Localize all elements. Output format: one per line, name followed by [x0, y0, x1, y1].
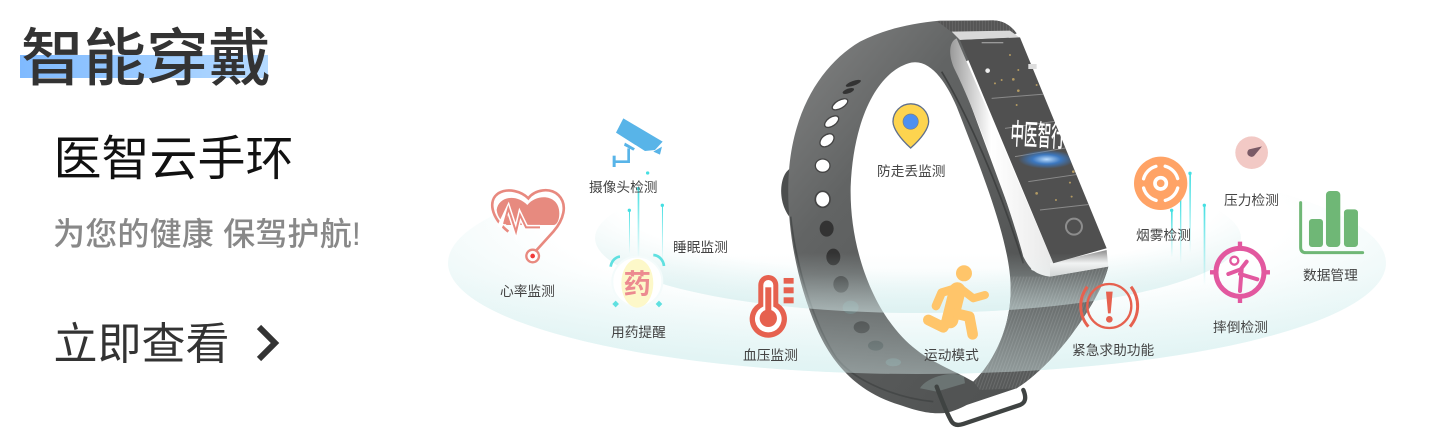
feature: 防走丢监测: 防走丢监测 — [877, 164, 945, 179]
buckle loop — [920, 374, 1025, 425]
feature: 心率监测: 心率监测 — [500, 283, 555, 299]
screen text: 中医智行 — [1010, 118, 1066, 153]
feature: 运动模式 — [924, 265, 985, 363]
icon: runner — [928, 265, 985, 334]
feature: 睡眠监测: 睡眠监测 — [673, 240, 728, 255]
feature: 防走丢监测 — [877, 104, 945, 179]
feature: 摔倒检测 — [1210, 242, 1270, 335]
icon: thermometer — [750, 275, 794, 338]
icon: surveillance camera — [613, 118, 663, 167]
strap holes — [815, 78, 901, 366]
metal bezel — [950, 38, 1053, 277]
feature: 烟雾检测: 烟雾检测 — [1136, 228, 1191, 243]
feature: 压力检测 — [1224, 136, 1279, 208]
icon: medicine alarm clock: 药 — [624, 269, 651, 300]
product name: 医智云手环 — [54, 133, 294, 186]
ribbed strap section — [973, 267, 1108, 390]
icon: emergency alert — [1081, 284, 1138, 328]
icon: fall detection — [1210, 242, 1270, 303]
cyan beam lines right — [1170, 172, 1206, 285]
feature: 数据管理 — [1301, 191, 1363, 283]
feature: 用药提醒 — [611, 255, 666, 340]
feature: 摄像头检测: 摄像头检测 — [589, 180, 657, 195]
side button — [781, 168, 791, 217]
feature: 数据管理: 数据管理 — [1303, 268, 1358, 283]
feature: 心率监测 — [492, 190, 564, 299]
icon: heart rate — [492, 190, 564, 262]
feature: 摔倒检测: 摔倒检测 — [1213, 319, 1268, 335]
feature: 烟雾检测 — [1134, 157, 1191, 243]
icon: smoke detector — [1134, 157, 1187, 210]
feature: 压力检测: 压力检测 — [1224, 193, 1279, 208]
strap inner rim — [942, 72, 1023, 263]
feature: 运动模式: 运动模式 — [924, 348, 979, 363]
strap — [788, 20, 1108, 413]
call to action with chevron: 立即查看 — [54, 320, 230, 369]
cyan beam lines left — [628, 171, 664, 262]
icon: location pin — [893, 104, 929, 148]
feature: 紧急求助功能: 紧急求助功能 — [1072, 343, 1154, 358]
platform ellipses — [448, 152, 1386, 374]
strap lower rim — [791, 217, 933, 402]
platform tint over band — [448, 152, 1386, 374]
tagline: 为您的健康 保驾护航! — [53, 216, 361, 252]
feature: 血压监测 — [743, 275, 798, 363]
strap top edge — [937, 20, 1017, 33]
icon: bar chart — [1301, 191, 1363, 253]
feature: 紧急求助功能 — [1072, 284, 1154, 358]
feature: 血压监测: 血压监测 — [743, 348, 798, 363]
feature: 摄像头检测 — [589, 118, 663, 195]
feature: 用药提醒: 用药提醒 — [611, 325, 666, 340]
screen — [960, 37, 1107, 263]
smart band product — [781, 20, 1108, 425]
section heading: 智能穿戴: 智能穿戴 — [21, 24, 271, 94]
icon: pressure gauge — [1235, 136, 1268, 169]
